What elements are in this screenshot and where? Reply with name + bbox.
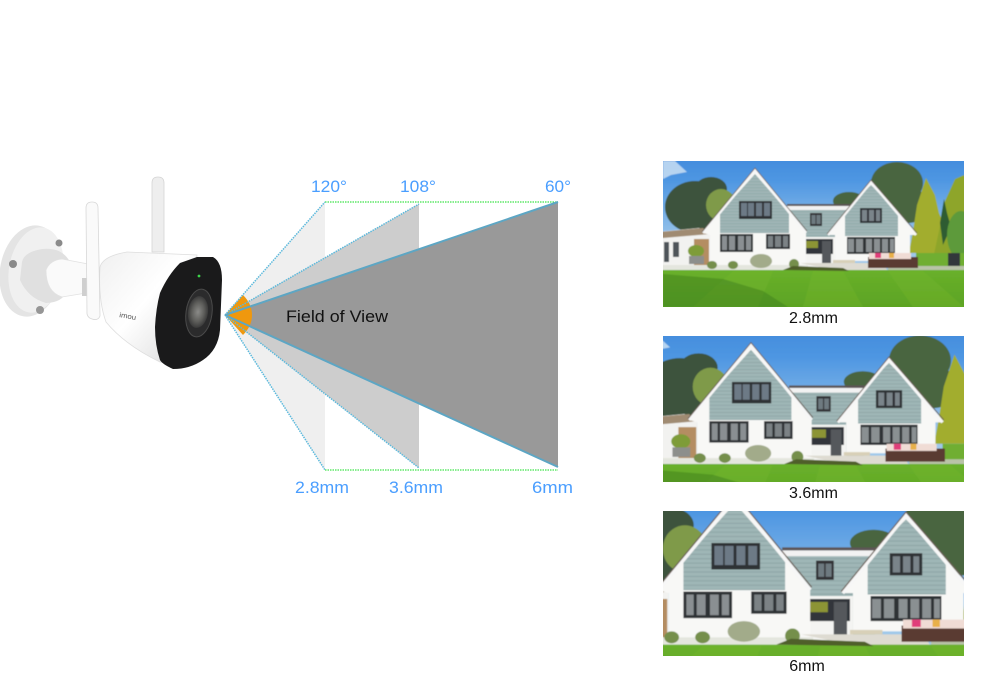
rear antenna xyxy=(152,177,164,252)
lens label 6mm: 6mm xyxy=(532,479,573,497)
black front face xyxy=(155,257,222,369)
brand mark: imou xyxy=(119,312,137,322)
cone edge lines xyxy=(225,202,558,470)
caption: 3.6mm: 3.6mm xyxy=(789,485,838,502)
108 degree cone xyxy=(225,204,419,468)
front antenna xyxy=(86,202,100,320)
60 degree cone xyxy=(225,202,558,467)
lens xyxy=(183,287,215,339)
photo: 3.6mm view xyxy=(663,336,964,482)
field of view label: Field of View xyxy=(286,307,389,326)
photo: 2.8mm view xyxy=(663,161,964,307)
panel: lens view comparison xyxy=(511,121,1000,700)
panel: field of view diagram xyxy=(225,178,573,497)
camera body xyxy=(100,252,197,366)
bottom range line xyxy=(325,469,558,471)
angle label 108: 108° xyxy=(400,178,436,196)
orange lens sector xyxy=(225,295,252,335)
top range line xyxy=(325,201,558,203)
caption: 2.8mm: 2.8mm xyxy=(789,310,838,327)
angle label 120: 120° xyxy=(311,178,347,196)
icon: security camera xyxy=(0,177,222,369)
120 degree cone xyxy=(225,202,325,470)
lens label 3.6mm: 3.6mm xyxy=(389,479,443,497)
photo: 6mm view xyxy=(663,511,964,656)
lens label 2.8mm: 2.8mm xyxy=(295,479,349,497)
wall mount xyxy=(0,220,102,322)
status light xyxy=(198,275,200,277)
angle label 60: 60° xyxy=(545,178,571,196)
caption: 6mm: 6mm xyxy=(789,658,825,675)
